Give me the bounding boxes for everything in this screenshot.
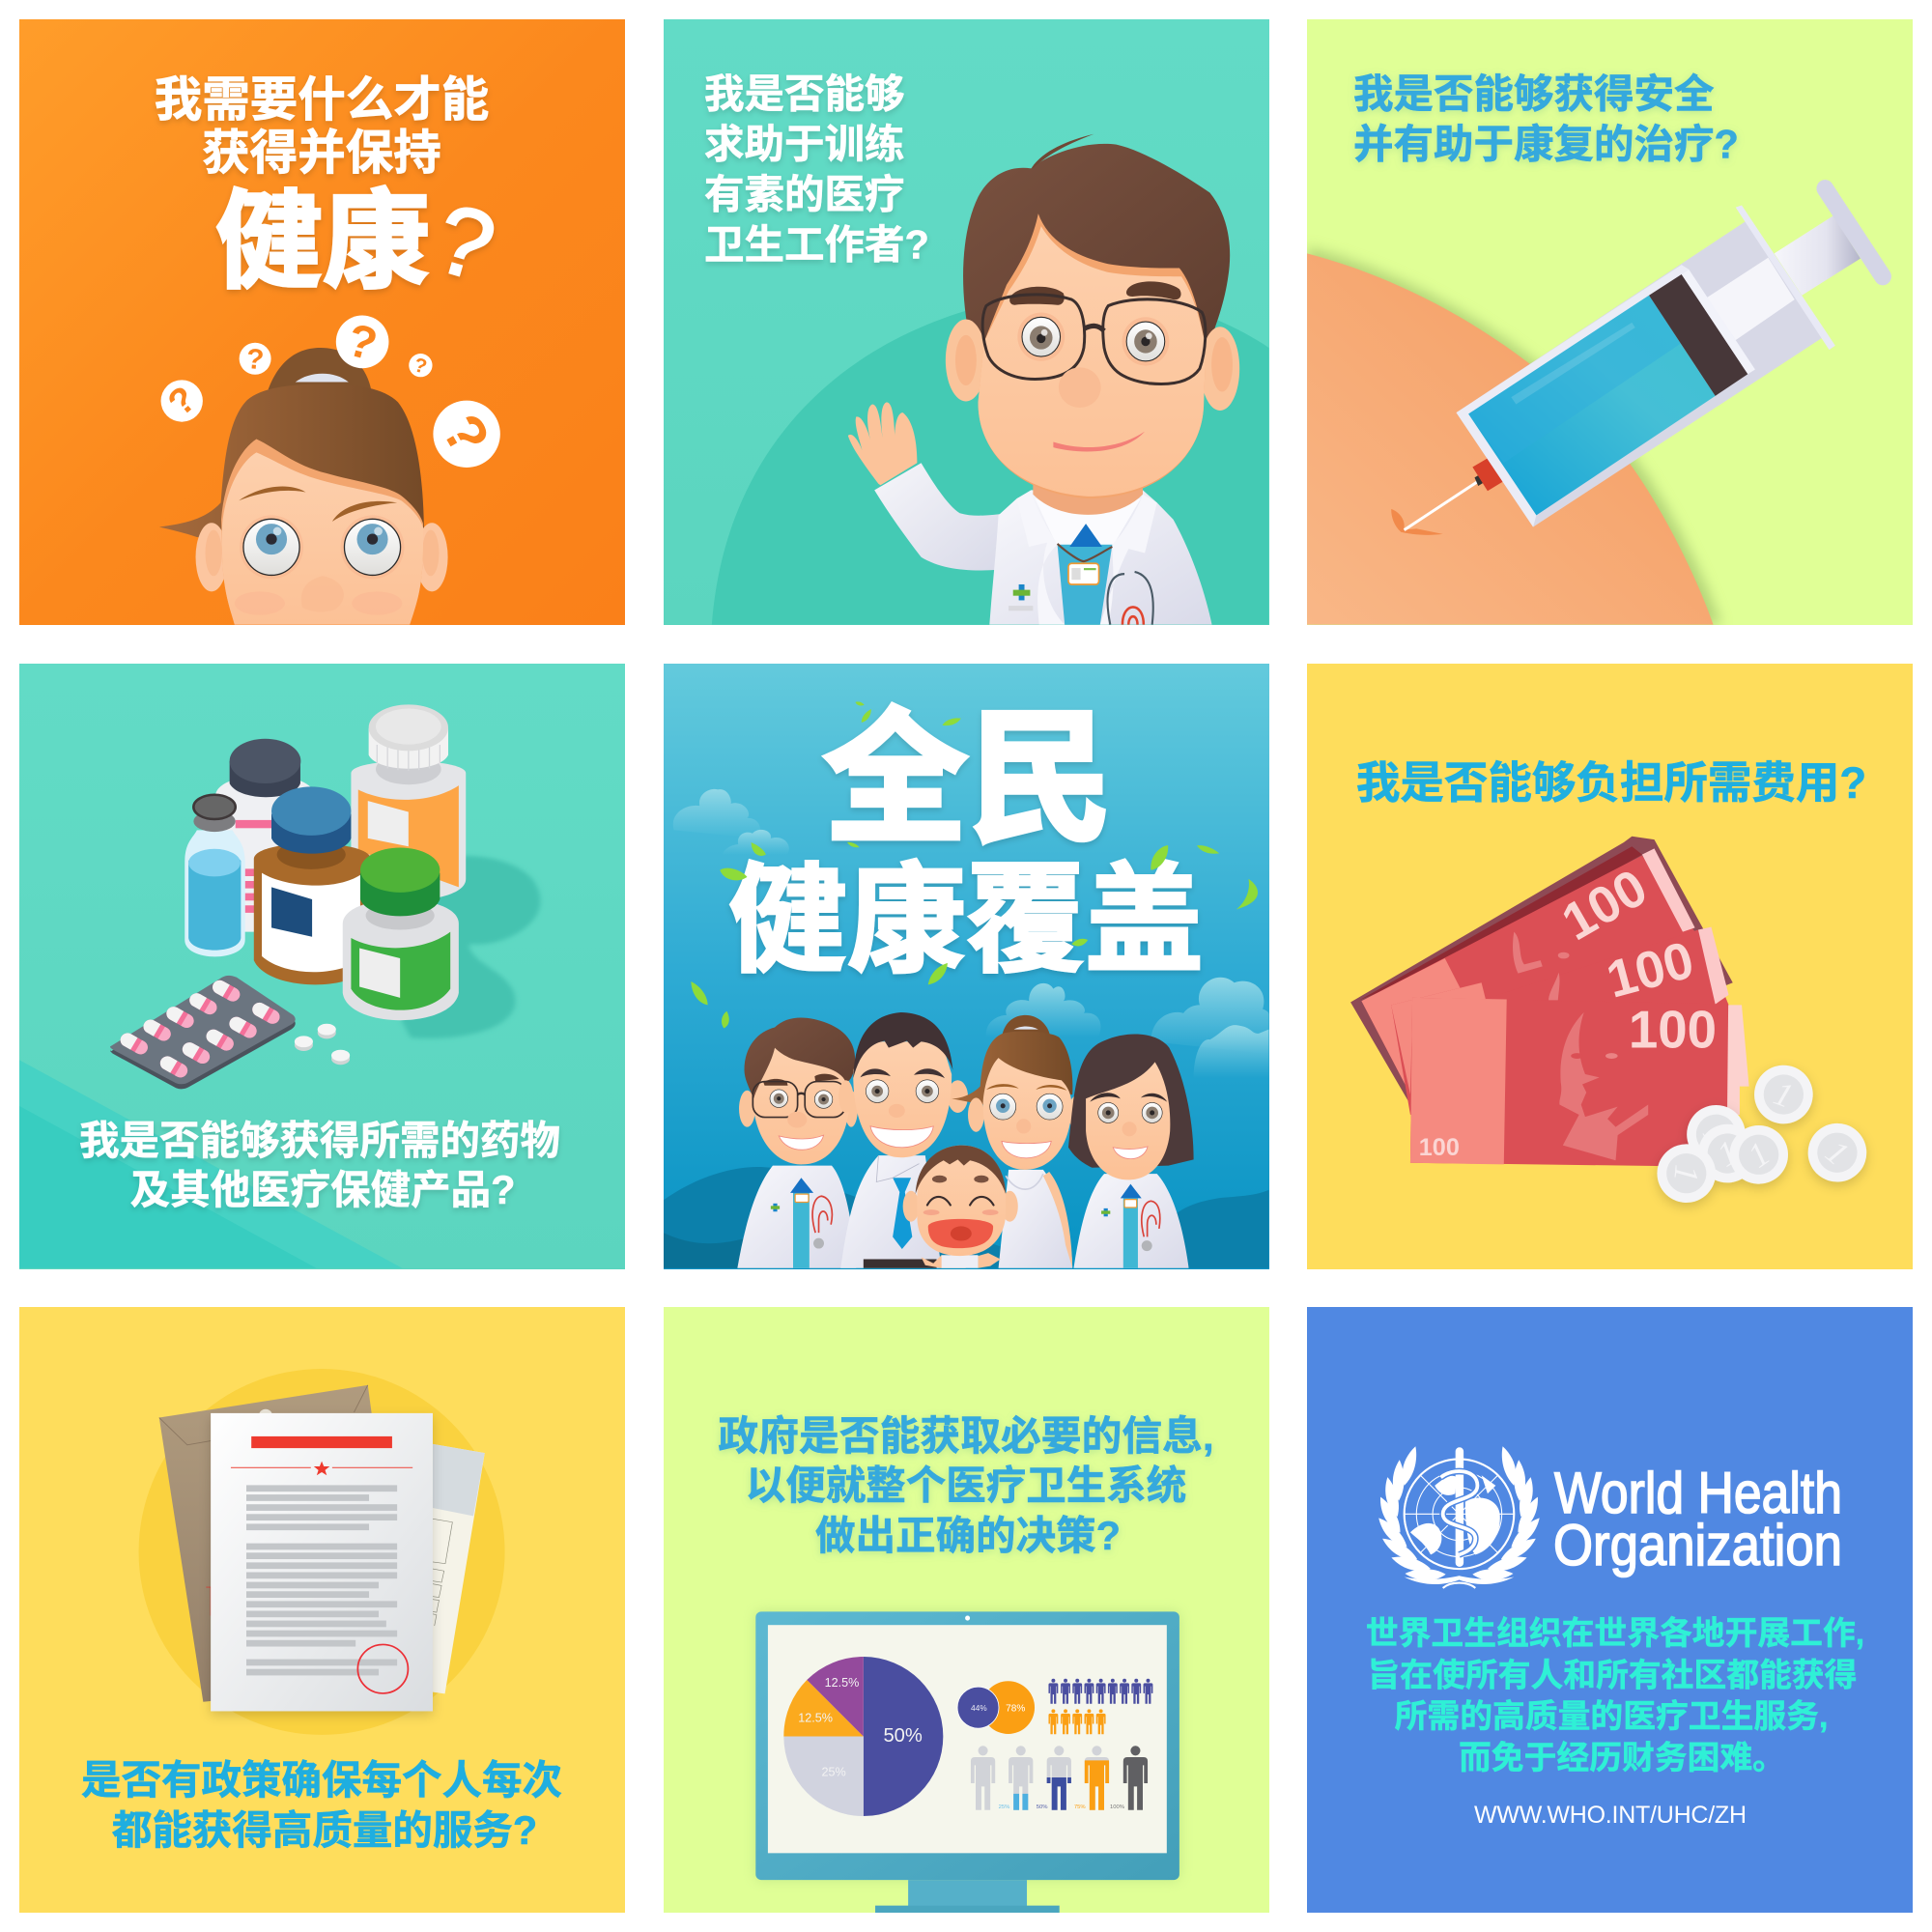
text: trained workers question: 我是否能够 [704, 71, 905, 116]
text: trained workers question [704, 71, 929, 267]
clouds [673, 789, 1268, 1078]
background circle [712, 294, 1268, 625]
text: safe treatment question [1353, 71, 1739, 166]
heading: what do I need [155, 73, 506, 302]
panel: policies (documents) [19, 1307, 625, 1913]
icon: woman with question marks: ? [342, 314, 383, 371]
heading: what do I need: 健康 [215, 182, 430, 301]
icon: banknotes: 100 [1419, 1134, 1460, 1161]
panel: affordability (money) [1307, 664, 1913, 1269]
background bands [19, 1060, 402, 1268]
venn diagram: 78% [1006, 1703, 1025, 1714]
icon: medicine bottles [185, 704, 540, 1038]
arm shadow [1307, 247, 1721, 625]
text: WHO mission statement: 旨在使所有人和所有社区都能获得 [1368, 1658, 1857, 1694]
icon: woman with question marks: ? [245, 343, 265, 376]
hills [664, 1167, 1268, 1268]
text: trained workers question: 求助于训练 [704, 122, 905, 166]
text: safe treatment question: 我是否能够获得安全 [1353, 71, 1715, 116]
icon: monitor [755, 1611, 1179, 1918]
text: policies question [81, 1757, 562, 1853]
text: medicines question [79, 1118, 560, 1212]
icon: woman with question marks: ? [412, 354, 429, 379]
panel: universal health coverage [664, 664, 1269, 1269]
pie chart: 25% [821, 1765, 846, 1778]
text: medicines question: 我是否能够获得所需的药物 [79, 1118, 560, 1163]
icon: WHO emblem [1378, 1446, 1540, 1590]
text: website URL: WWW.WHO.INT/UHC/ZH [1474, 1802, 1747, 1829]
logotype: World Health Organization [1553, 1461, 1842, 1577]
text: information question: 做出正确的决策? [815, 1513, 1121, 1558]
icon: doctor waving [848, 134, 1239, 625]
icon: banknotes: 100 [1629, 1000, 1717, 1060]
title: universal health coverage [728, 697, 1204, 987]
pictogram: large people percentages: 75% [1074, 1804, 1086, 1810]
icon: coins [1655, 1057, 1879, 1206]
panel: trained health workers (teal) [664, 19, 1269, 625]
text: information question: 以便就整个医疗卫生系统 [746, 1463, 1186, 1508]
text: WHO mission statement: 世界卫生组织在世界各地开展工作, [1366, 1615, 1864, 1652]
panel: health question (orange) [19, 19, 625, 625]
logotype: World Health Organization: World Health [1554, 1461, 1842, 1525]
panel: medicines [19, 664, 625, 1269]
icon: banknotes: 100 [1552, 858, 1657, 952]
icon: woman with question marks: ? [430, 404, 501, 466]
venn diagram: 44% [971, 1703, 987, 1713]
pictogram: large people percentages: 25% [999, 1804, 1010, 1810]
venn diagram [957, 1681, 1035, 1734]
text: information question: 政府是否能获取必要的信息, [718, 1413, 1214, 1459]
pie chart: 12.5% [825, 1676, 859, 1690]
heading: what do I need: ? [424, 184, 506, 302]
icon: blister pack and pills [110, 976, 350, 1089]
pie chart: 12.5% [798, 1711, 833, 1724]
text: policies question: 都能获得高质量的服务? [112, 1807, 537, 1853]
panel: safe treatment (syringe) [1307, 19, 1913, 625]
icon: woman with question marks [159, 314, 501, 625]
pictogram: large people percentages: 50% [1037, 1804, 1048, 1810]
icon: syringe [1391, 188, 1883, 535]
title: universal health coverage: 全民 [823, 697, 1113, 860]
text: trained workers question: 有素的医疗 [704, 172, 905, 216]
text: WHO mission statement [1366, 1615, 1864, 1776]
text: medicines question: 及其他医疗保健产品? [130, 1167, 515, 1212]
panel: information (monitor) [664, 1307, 1269, 1918]
icon: banknotes: 100 [1601, 930, 1699, 1009]
pie chart [783, 1657, 943, 1816]
icon: banknotes [1350, 837, 1749, 1167]
icon: family and doctors [737, 1012, 1194, 1268]
heading: what do I need: 我需要什么才能 [155, 73, 489, 127]
pictogram: small people [1048, 1679, 1152, 1734]
arm [1307, 253, 1714, 625]
pictogram: large people percentages: 100% [1110, 1804, 1125, 1810]
text: affordability question: 我是否能够负担所需费用? [1356, 758, 1866, 808]
icon: woman with question marks: ? [160, 378, 204, 424]
text: information question [718, 1413, 1214, 1558]
title: universal health coverage: 健康覆盖 [728, 855, 1204, 987]
text: policies question: 是否有政策确保每个人每次 [81, 1757, 562, 1803]
icon: policy documents [159, 1385, 485, 1711]
panel: WHO statement [1307, 1307, 1913, 1913]
heading: what do I need: 获得并保持 [202, 127, 441, 180]
pie chart: 50% [883, 1725, 923, 1747]
logotype: World Health Organization: Organization [1553, 1513, 1842, 1577]
text: WHO mission statement: 所需的高质量的医疗卫生服务, [1395, 1698, 1828, 1735]
icon: falling leaves [691, 701, 1258, 1028]
background circle [139, 1369, 505, 1735]
text: safe treatment question: 并有助于康复的治疗? [1353, 122, 1739, 166]
text: WHO mission statement: 而免于经历财务困难。 [1459, 1740, 1785, 1776]
text: trained workers question: 卫生工作者? [704, 222, 929, 267]
pictogram: large people percentages [971, 1746, 1148, 1810]
